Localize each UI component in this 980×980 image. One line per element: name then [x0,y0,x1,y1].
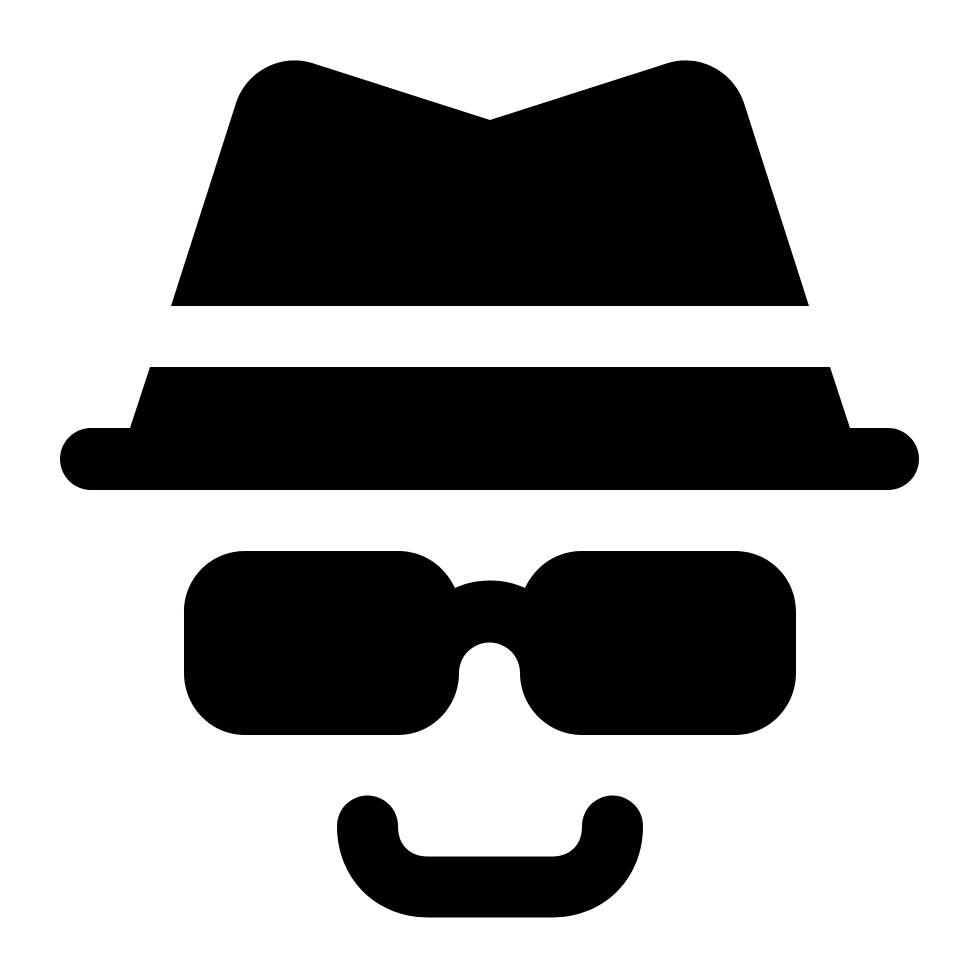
icon: moustache smile [368,826,612,887]
icon: hat brim [60,367,919,490]
icon: hat crown [171,60,809,306]
icon: sunglasses [184,551,796,735]
